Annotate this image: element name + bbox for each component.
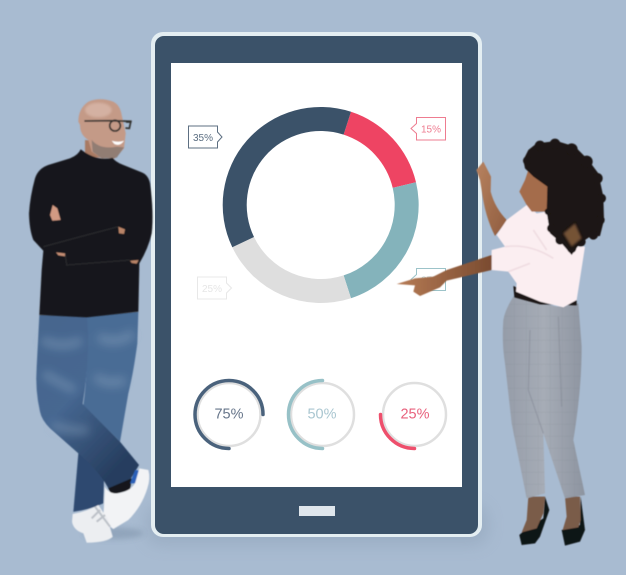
pointing arm bbox=[397, 255, 492, 296]
segment: 25% grey bbox=[232, 237, 351, 303]
gauge: 25% bbox=[380, 383, 446, 448]
raised arm bbox=[476, 162, 507, 236]
tablet bbox=[146, 32, 488, 545]
man: sweater, arms and head bbox=[29, 99, 153, 317]
sweater fold bbox=[43, 227, 130, 265]
neck bbox=[85, 140, 117, 158]
right heel bbox=[562, 497, 585, 546]
tablet screen bbox=[171, 63, 462, 487]
callout: 15%: 15% bbox=[421, 124, 441, 136]
trouser crease bbox=[528, 317, 562, 433]
fingers low left bbox=[56, 252, 65, 256]
belt bbox=[513, 286, 577, 305]
hair highlight bbox=[563, 223, 582, 247]
segment: 35% navy bbox=[223, 107, 351, 247]
laces bbox=[92, 507, 110, 527]
right thigh bbox=[83, 312, 138, 442]
segment: 15% red bbox=[344, 112, 416, 188]
left foot skin bbox=[522, 497, 545, 532]
callout: 25% grey: 25% bbox=[202, 284, 222, 295]
callout: 35% bbox=[188, 126, 222, 148]
tablet body bbox=[155, 36, 478, 534]
glasses bbox=[84, 120, 132, 131]
gauge: 75%: 75% bbox=[214, 406, 244, 422]
donut chart bbox=[223, 107, 419, 303]
blue shoe tab bbox=[130, 470, 140, 483]
callout: 25% teal bbox=[411, 268, 446, 290]
curly hair bbox=[523, 139, 606, 255]
blouse folds bbox=[505, 230, 553, 272]
beard bbox=[92, 140, 124, 158]
fingers low right bbox=[130, 260, 139, 264]
bald head bbox=[78, 99, 126, 158]
face bbox=[519, 165, 550, 212]
callout: 25% teal: 25% bbox=[421, 276, 441, 286]
grey plaid trousers bbox=[503, 297, 585, 498]
home button bbox=[299, 506, 335, 516]
segment: 25% teal bbox=[344, 182, 419, 298]
gauge: 75% bbox=[195, 380, 263, 448]
denim fading bbox=[42, 333, 133, 430]
right sneaker bbox=[103, 468, 149, 529]
left heel bbox=[519, 497, 549, 545]
head highlight bbox=[85, 103, 112, 117]
ground shadow bbox=[83, 527, 143, 539]
callout: 25% grey bbox=[198, 277, 232, 299]
black sweater bbox=[29, 149, 153, 317]
smile bbox=[112, 141, 124, 145]
man bbox=[29, 99, 153, 543]
gauge: 50% bbox=[288, 380, 354, 448]
callout: 15% bbox=[411, 118, 446, 140]
callout: 35%: 35% bbox=[193, 133, 213, 144]
woman: torso, arms and head bbox=[397, 139, 606, 307]
hand right bbox=[118, 227, 125, 234]
gauge: 50%: 50% bbox=[307, 406, 337, 422]
back leg bbox=[73, 453, 104, 512]
front leg bbox=[36, 313, 139, 492]
hand left bbox=[50, 205, 61, 221]
tablet frame bbox=[151, 32, 482, 537]
right foot skin bbox=[563, 497, 581, 530]
woman bbox=[397, 139, 606, 546]
gauge: 25%: 25% bbox=[400, 406, 430, 422]
plaid pattern bbox=[503, 297, 585, 498]
black sock bbox=[108, 478, 132, 495]
woman: trousers and heels bbox=[503, 297, 585, 546]
left sneaker bbox=[72, 505, 113, 543]
blouse bbox=[491, 205, 585, 307]
man: jeans and shoes bbox=[36, 312, 149, 543]
